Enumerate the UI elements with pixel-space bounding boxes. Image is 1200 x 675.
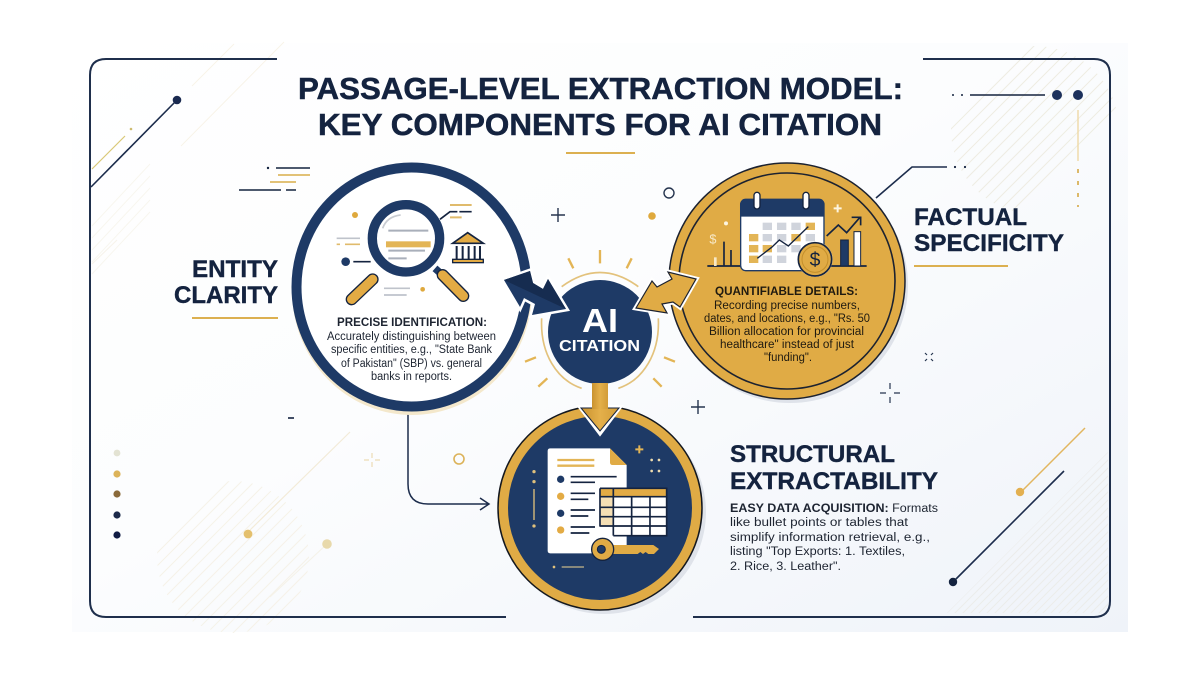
circle shadow <box>672 167 908 403</box>
text: quantifiable details: Billion allocation for provincial <box>709 326 864 338</box>
hub text: AI <box>582 302 618 339</box>
title <box>298 71 903 142</box>
icon: calendar and chart: $ <box>810 250 821 271</box>
connector arrow: left circle to bottom circle <box>408 405 489 510</box>
navy disc with gold ring <box>503 411 697 605</box>
arrow: hub to right circle <box>636 272 696 313</box>
text: easy data acquisition: listing "Top Exports: 1. Textiles, <box>730 546 905 558</box>
ring <box>296 168 526 406</box>
text: quantifiable details: "funding". <box>764 352 812 364</box>
text: easy data acquisition: like bullet points or tables that <box>730 517 909 529</box>
decorative hatching <box>92 42 1116 633</box>
text: easy data acquisition: EASY DATA ACQUISITION: Formats <box>730 503 938 515</box>
icon: calendar and chart <box>707 192 867 277</box>
gold disc <box>669 163 905 399</box>
frame <box>90 59 1110 617</box>
hub text <box>559 302 640 355</box>
label: entity clarity: ENTITY <box>192 256 278 283</box>
panel: AI citation hub <box>525 250 675 388</box>
text: precise identification: Accurately distinguishing between <box>327 331 496 343</box>
icon: calendar and chart: $ <box>709 232 716 246</box>
arrow: hub to left circle <box>504 271 566 315</box>
panel: factual specificity circle <box>669 163 908 403</box>
text: quantifiable details: dates, and locations, e.g., "Rs. 50 <box>704 313 870 325</box>
hub circle <box>548 280 652 384</box>
ring shadow <box>292 167 532 415</box>
label: factual specificity: SPECIFICITY <box>914 230 1064 257</box>
left dots column <box>113 450 121 539</box>
text: precise identification: specific entities, e.g., "State Bank <box>331 344 492 356</box>
top-left accent lines <box>91 96 310 190</box>
title: PASSAGE-LEVEL EXTRACTION MODEL: <box>298 71 903 106</box>
text: quantifiable details: Recording precise numbers, <box>714 300 860 312</box>
text: quantifiable details: QUANTIFIABLE DETAILS: <box>715 284 858 298</box>
title: KEY COMPONENTS FOR AI CITATION <box>318 107 882 142</box>
text: precise identification: PRECISE IDENTIFICATION: <box>337 315 487 329</box>
text: easy data acquisition: 2. Rice, 3. Leather". <box>730 561 841 573</box>
label: structural extractability: STRUCTURAL <box>730 441 895 468</box>
background panel <box>72 43 1128 632</box>
text: quantifiable details: healthcare" instead of just <box>720 339 855 351</box>
top-right accent lines <box>952 90 1083 207</box>
text: easy data acquisition: simplify information retrieval, e.g., <box>730 532 930 544</box>
glow arcs and rays <box>525 250 675 388</box>
label: entity clarity <box>174 256 278 319</box>
text: precise identification: of Pakistan" (SBP) vs. general <box>341 358 482 370</box>
text: precise identification <box>327 315 496 383</box>
label: entity clarity: CLARITY <box>174 282 278 309</box>
circle shadow <box>502 410 706 614</box>
icon: magnifying glass and bank <box>337 205 483 299</box>
arrow: hub to bottom circle <box>578 383 622 435</box>
panel: entity clarity circle <box>292 167 532 415</box>
text: precise identification: banks in reports. <box>371 371 452 383</box>
label: structural extractability: EXTRACTABILITY <box>730 468 938 495</box>
icon: document, table and key <box>532 445 667 568</box>
panel: structural extractability circle <box>498 406 706 614</box>
title underline <box>566 152 635 154</box>
label: factual specificity <box>914 204 1064 267</box>
text: easy data acquisition <box>730 503 938 573</box>
scattered decorations <box>244 166 1085 586</box>
label: factual specificity: FACTUAL <box>914 204 1027 231</box>
label: structural extractability <box>730 441 938 495</box>
hub text: CITATION <box>559 338 640 355</box>
text: quantifiable details <box>704 284 870 364</box>
